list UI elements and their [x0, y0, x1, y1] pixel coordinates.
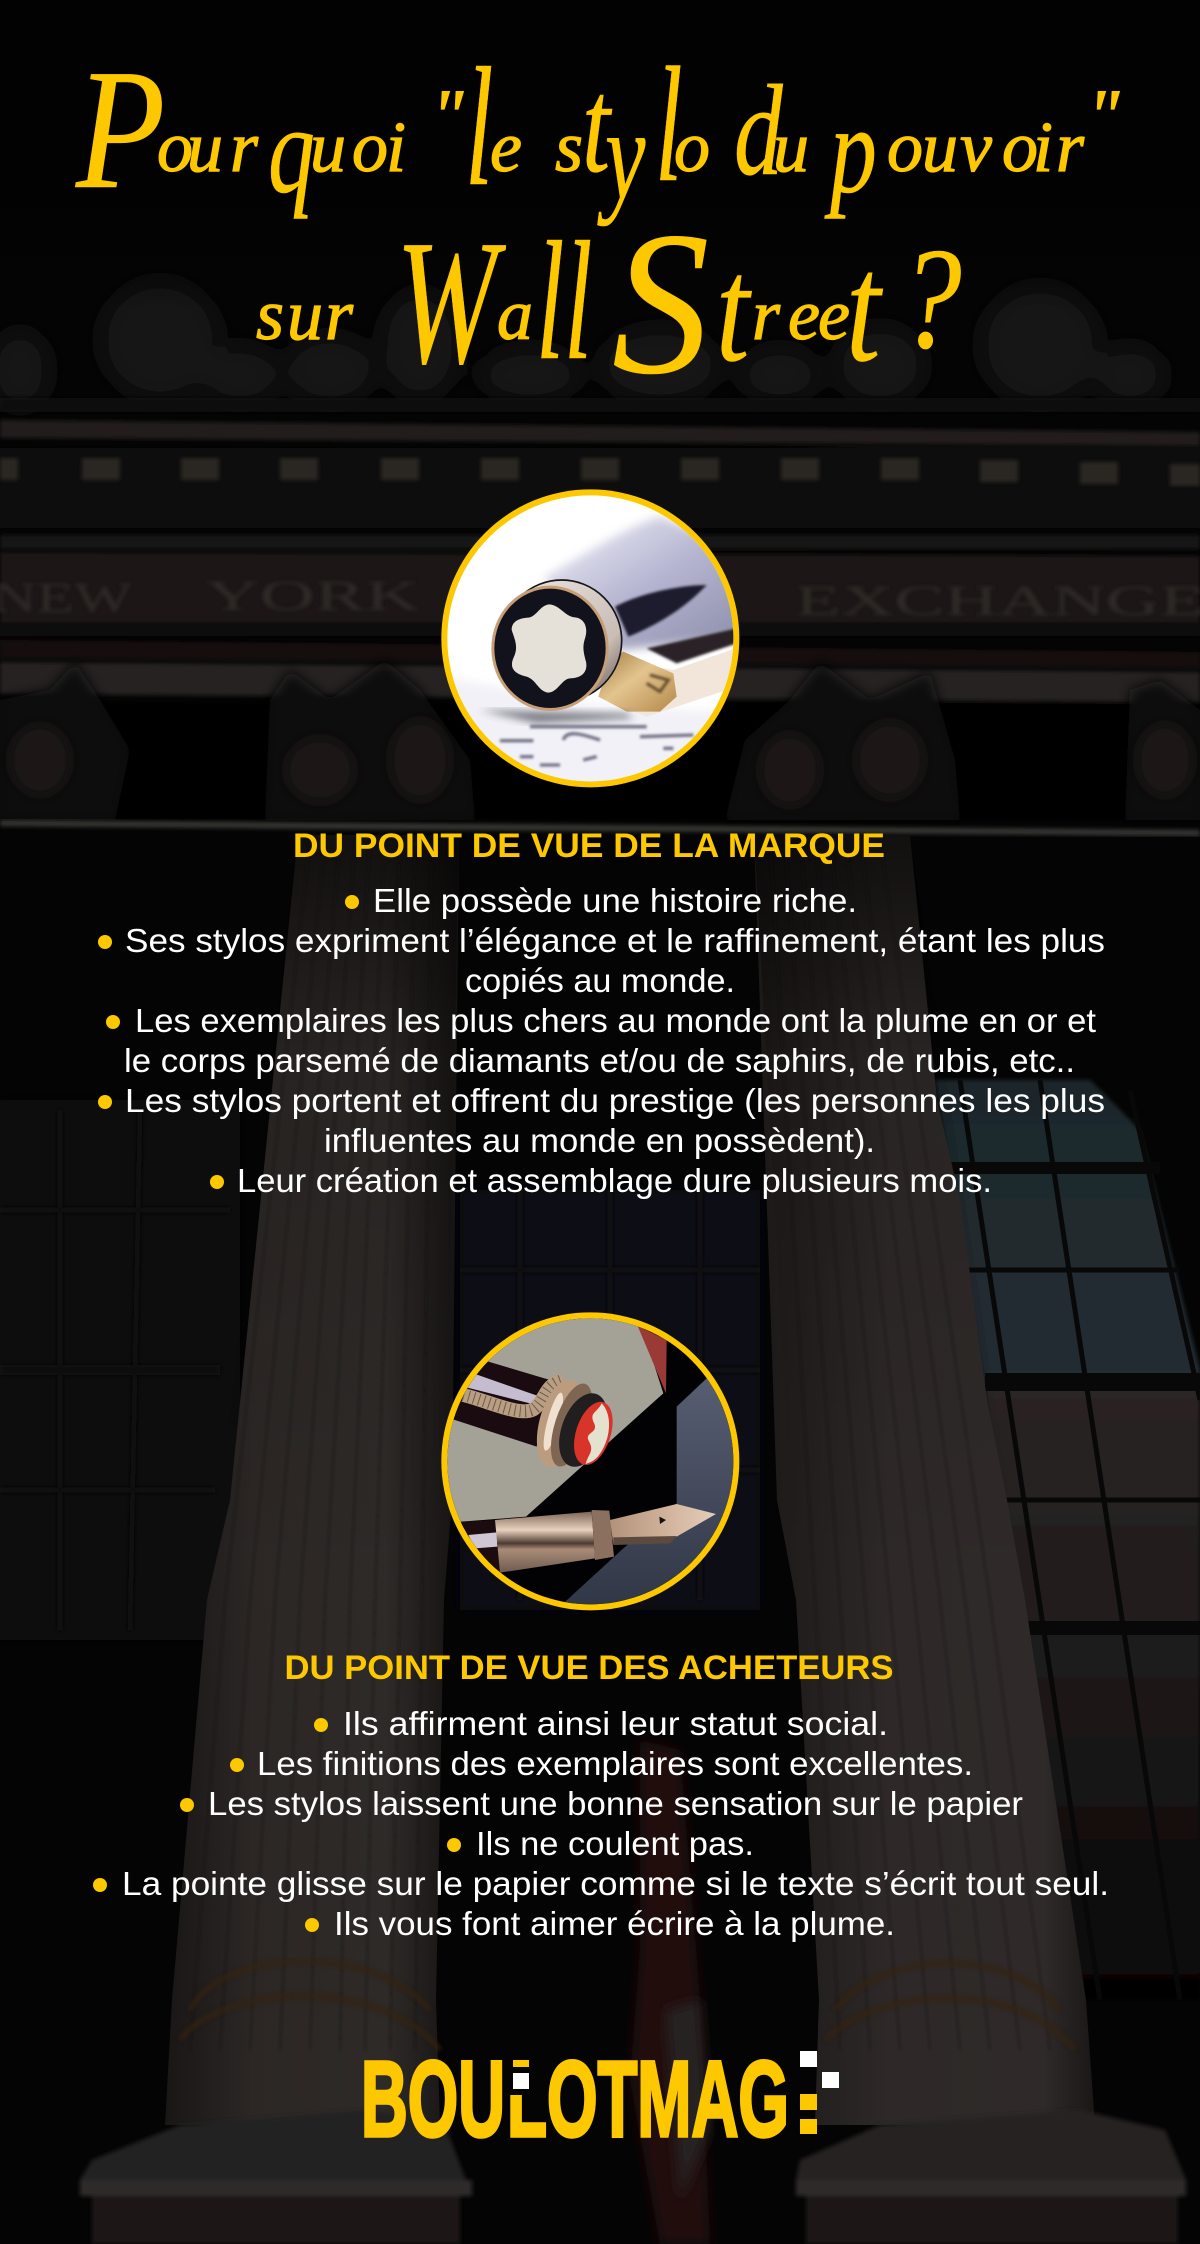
title line 1: p — [824, 81, 877, 219]
buyers list: La pointe glisse sur le papier comme si le texte s’écrit tout seul. — [122, 1865, 1109, 1902]
title line 2: a — [497, 275, 533, 355]
brand list: Ses stylos expriment l’élégance et le raffinement, étant les plus — [125, 922, 1105, 959]
column bases — [80, 2110, 1186, 2244]
serpent clip — [463, 1380, 563, 1411]
rings — [536, 1380, 578, 1467]
left column — [165, 835, 459, 2125]
buyers list: Les stylos laissent une bonne sensation sur le papier — [208, 1785, 1023, 1822]
flag — [630, 1740, 710, 2244]
title line 1: d — [734, 59, 783, 202]
horizontal lintel line — [0, 820, 1200, 836]
buyers list: Ils ne coulent pas. — [476, 1825, 754, 1862]
title line 1: o — [674, 107, 710, 187]
capitals — [0, 660, 1200, 820]
title line 1 — [75, 34, 1120, 227]
column rust bands — [180, 1961, 1075, 2050]
buyers list: Ils affirment ainsi leur statut social. — [343, 1705, 888, 1742]
title line 1: our — [157, 107, 259, 187]
logo: BOULOTMAG: OTMAG — [547, 2038, 789, 2159]
brand list: le corps parsemé de diamants et/ou de saphirs, de rubis, etc.. — [124, 1042, 1075, 1079]
title line 1: q — [268, 81, 315, 219]
title line 1: uoi — [310, 107, 406, 187]
section heading: buyers: DU POINT DE VUE DES ACHETEURS — [284, 1649, 894, 1687]
title line 1: y — [597, 83, 646, 227]
brand list: Les exemplaires les plus chers au monde ont la plume en or et — [135, 1002, 1096, 1039]
entablature bands — [0, 398, 1200, 820]
writing — [500, 727, 693, 765]
title line 2: l — [564, 208, 592, 396]
red and white top — [574, 1402, 613, 1465]
lower pen barrel — [460, 1520, 500, 1572]
inscription — [0, 574, 1200, 625]
paper — [452, 674, 716, 782]
brand list: Elle possède une histoire riche. — [373, 882, 857, 919]
buyers list: Les finitions des exemplaires sont excellentes. — [257, 1745, 973, 1782]
brand list — [98, 882, 1105, 1199]
title line 1: ouvoir — [887, 107, 1085, 187]
title line 2: ree — [752, 275, 850, 355]
nib — [610, 1504, 716, 1544]
barrel — [543, 517, 747, 650]
right windows — [935, 1080, 1200, 2000]
upper pen barrel — [454, 1362, 548, 1447]
inscription: YORK — [205, 574, 420, 620]
blue panel — [565, 1378, 734, 1604]
knurled cap — [559, 1393, 605, 1467]
title line 2 — [256, 191, 962, 417]
title — [75, 34, 1120, 417]
title line 1: l — [465, 34, 493, 222]
brand list: copiés au monde. — [465, 962, 735, 999]
title line 2: W — [396, 203, 507, 401]
title line 1: " — [1088, 75, 1120, 157]
logo: BOULOTMAG: L — [507, 2038, 547, 2159]
title line 2: t — [716, 227, 752, 393]
white star emblem — [512, 604, 586, 693]
clip — [634, 649, 733, 716]
title line 2: l — [536, 208, 564, 396]
brand list: Les stylos portent et offrent du prestige (les personnes les plus — [125, 1082, 1105, 1119]
brand list: Leur création et assemblage dure plusieurs mois. — [237, 1162, 992, 1199]
photo: Montblanc pen cap — [440, 487, 747, 790]
title line 1: e — [490, 107, 522, 187]
logo: BOULOTMAG — [364, 2051, 839, 2139]
center windows grid — [0, 1110, 760, 1630]
inscription: EXCHANGE — [795, 579, 1200, 625]
cap disc — [491, 586, 609, 711]
title line 1: P — [75, 34, 165, 225]
photo: fountain pens — [440, 1310, 753, 1623]
title line 2: ? — [900, 219, 962, 379]
right column — [754, 835, 1095, 2125]
capital foliage — [10, 720, 1193, 806]
title line 2: S — [612, 191, 709, 417]
title line 1: " — [432, 75, 464, 157]
section heading: brand: DU POINT DE VUE DE LA MARQUE — [293, 827, 885, 865]
title line 1: t — [582, 51, 613, 200]
red corner — [638, 1326, 667, 1393]
title line 1: l — [655, 34, 683, 216]
grey paper — [440, 1310, 663, 1523]
left window — [0, 1100, 760, 1640]
title line 2: sur — [256, 275, 354, 355]
logo: BOULOTMAG: BOU — [361, 2038, 505, 2159]
dentils — [0, 458, 1200, 486]
title line 1: u — [773, 107, 809, 187]
top darkening — [0, 0, 1200, 310]
buyers list — [93, 1705, 1109, 1942]
pediment statues — [0, 280, 1165, 410]
brand list: influentes au monde en possèdent). — [324, 1122, 875, 1159]
buyers list: Ils vous font aimer écrire à la plume. — [334, 1905, 895, 1942]
title line 1: s — [555, 107, 583, 187]
title line 2: t — [846, 223, 883, 394]
collar — [524, 579, 622, 696]
